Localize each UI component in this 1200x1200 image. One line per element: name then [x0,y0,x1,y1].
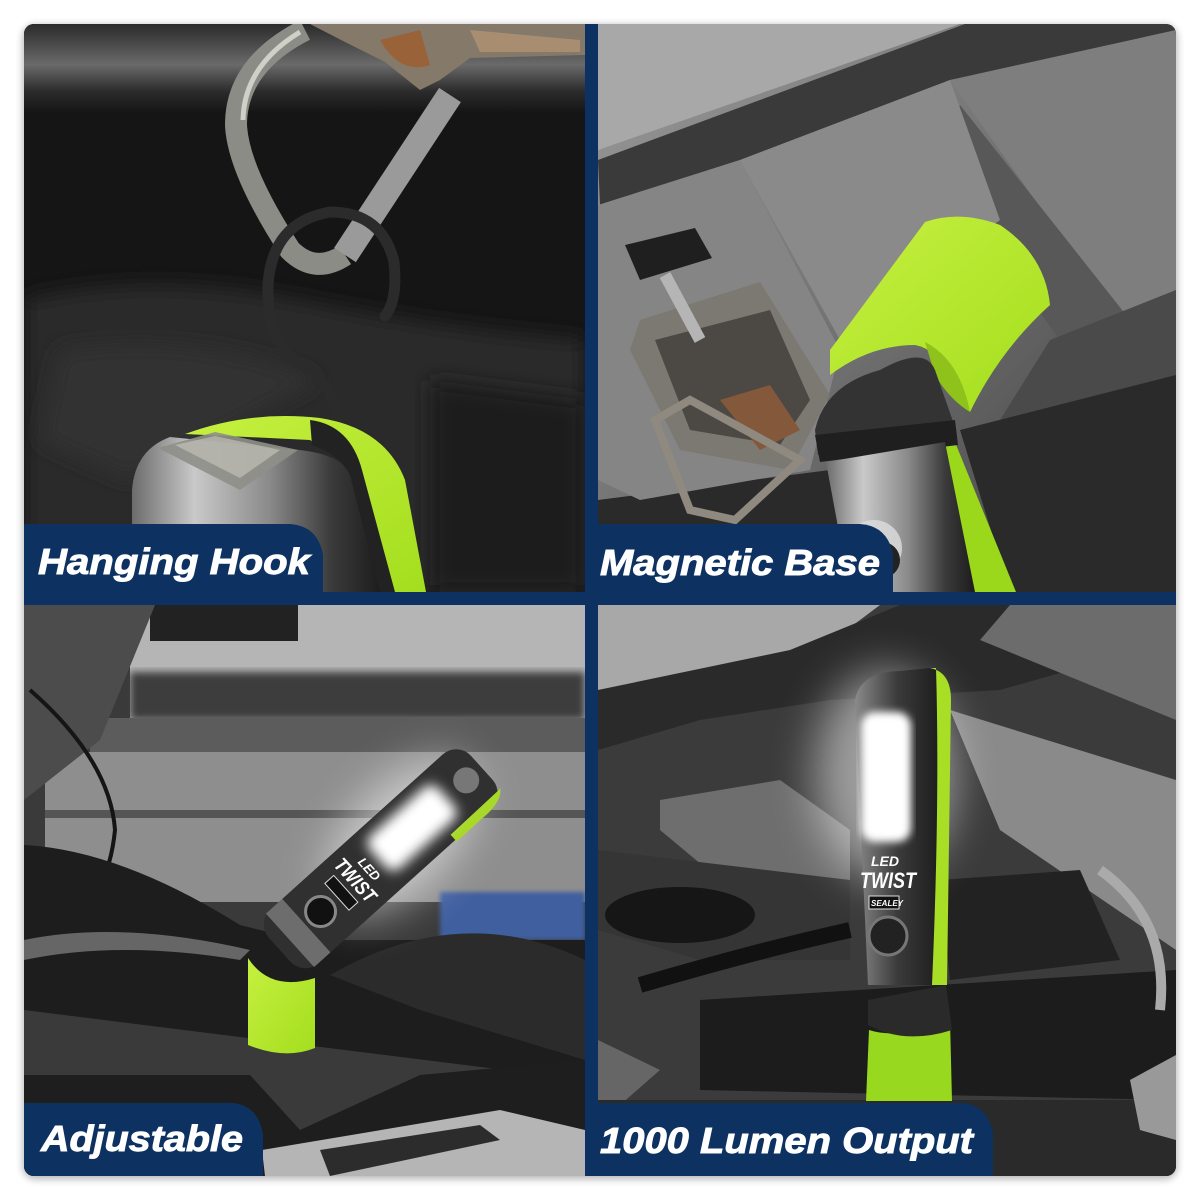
icon: steel bracket [236,24,585,264]
glow [299,734,501,942]
label: adjustable: Adjustable [40,1118,243,1159]
text: light branding: TWIST [860,868,917,893]
panel: 1000 lumen output [598,605,1176,1176]
icon: lime base [248,958,315,1053]
icon: angled work light: TWIST [329,854,381,909]
label: adjustable [24,1103,263,1176]
glow [815,670,955,880]
icon: angled work light [264,749,500,968]
label: 1000 lumen output: 1000 Lumen Output [600,1120,975,1161]
icon: magnetic lime base [830,217,1050,412]
label: 1000 lumen output [598,1103,993,1176]
icon: work light top [132,416,426,592]
panel: hanging hook [24,24,585,592]
icon: angled work light: LED [355,854,384,884]
icon: black s-hook [262,206,400,318]
text: light branding [860,853,917,909]
text: light branding: SEALEY [871,899,904,908]
panel: adjustable [24,605,585,1176]
label: hanging hook [24,524,323,592]
icon: upright work light [855,668,952,1101]
icon: latch [625,228,830,520]
label: magnetic base [598,524,893,592]
text: light branding: LED [871,853,899,869]
label: hanging hook: Hanging Hook [38,541,312,582]
icon: work light [815,358,1016,592]
label: magnetic base: Magnetic Base [600,542,880,583]
panel: magnetic base [598,24,1176,592]
